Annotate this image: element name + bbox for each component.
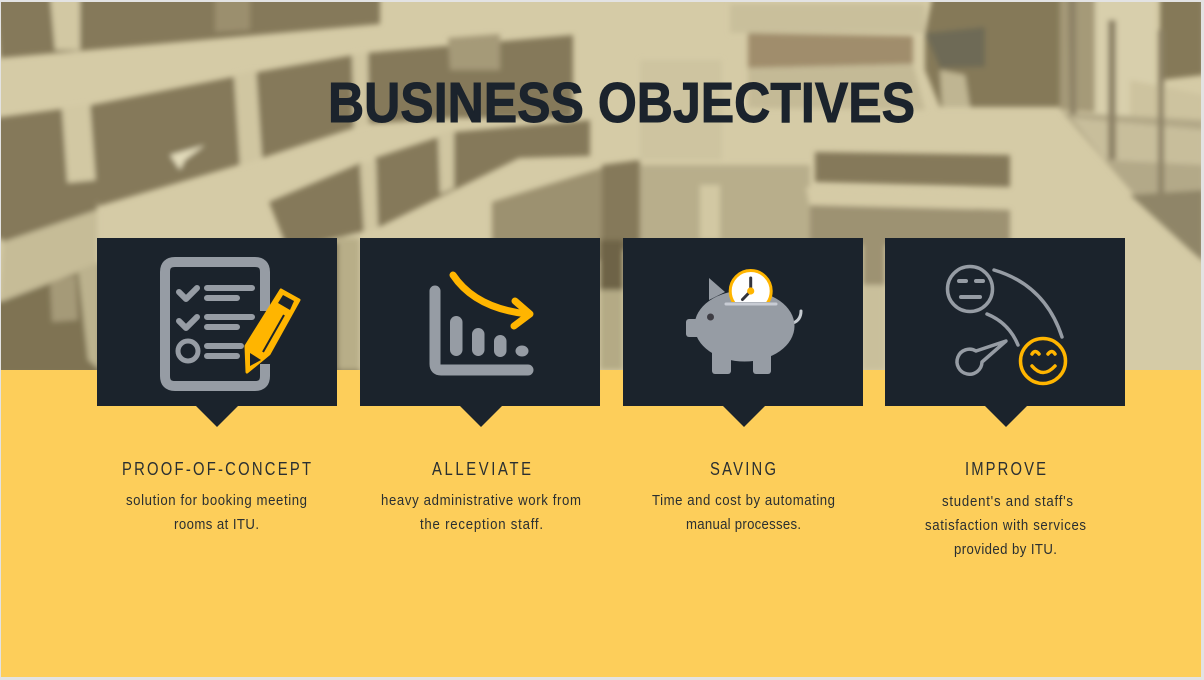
panel: alleviate <box>360 238 600 532</box>
heading: ALLEVIATE <box>432 458 531 479</box>
right half <box>730 4 925 33</box>
title: BUSINESS OBJECTIVES <box>328 71 915 135</box>
panel: improve <box>885 238 1125 557</box>
description: rooms at ITU. <box>174 515 259 532</box>
panel: saving <box>623 238 863 532</box>
description: solution for booking meeting <box>126 491 307 508</box>
description: student's and staff's <box>942 492 1073 509</box>
description: provided by ITU. <box>954 540 1057 557</box>
heading: IMPROVE <box>965 458 1046 479</box>
description: satisfaction with services <box>925 516 1086 533</box>
description: manual processes. <box>686 515 801 532</box>
description <box>381 491 581 532</box>
icon: satisfaction gauge faces <box>948 266 1066 384</box>
yellow lower panel <box>1 370 1201 677</box>
description <box>652 491 835 532</box>
icon: declining chart <box>435 275 530 370</box>
description <box>925 492 1086 557</box>
panel: proof-of-concept <box>97 238 337 532</box>
icon: piggy bank with clock <box>686 270 801 374</box>
description <box>126 491 307 532</box>
heading: SAVING <box>710 458 776 479</box>
heading: PROOF-OF-CONCEPT <box>122 458 311 479</box>
description: heavy administrative work from <box>381 491 581 508</box>
description: the reception staff. <box>420 515 543 532</box>
description: Time and cost by automating <box>652 491 835 508</box>
background photo: building atrium <box>0 0 1204 375</box>
icon: checklist with pencil <box>165 262 299 386</box>
